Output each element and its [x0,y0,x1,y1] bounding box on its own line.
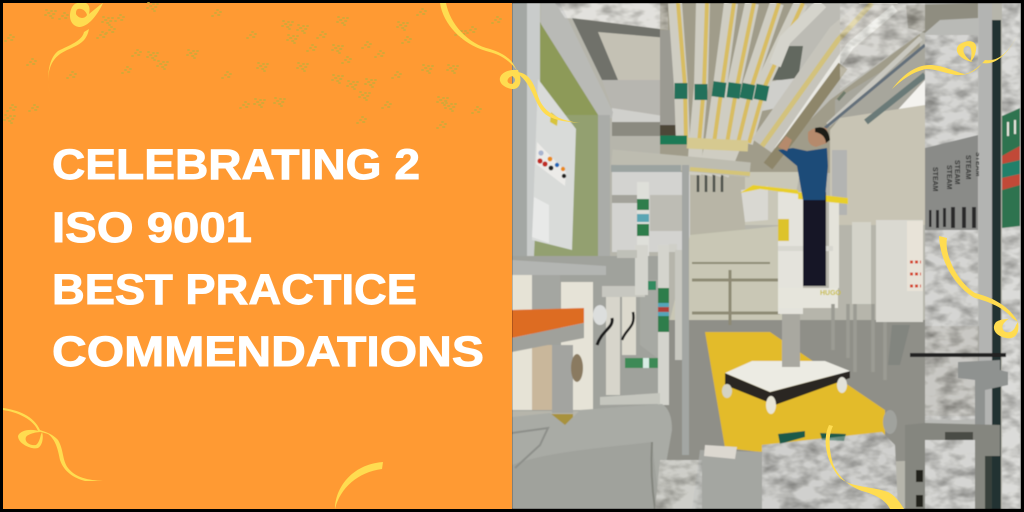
back shelving [692,263,780,325]
left column and beams [512,3,689,455]
orange actuator [512,308,584,426]
lift mast and platform [740,185,848,367]
ribbon: top left [48,3,103,93]
electrical cabinets [833,220,923,380]
technician [778,127,830,286]
big insulated column [906,3,979,509]
ribbon: bottom right [826,425,904,509]
heading: ISO 9001 [52,204,252,252]
silver duct at bottom [655,460,702,509]
side pipe base [1002,3,1021,509]
green valves [778,431,846,444]
photo: plant room with pipework [512,0,1021,509]
floor [664,320,926,462]
control cabinet [532,79,576,250]
foil texture [555,3,1020,509]
insulation bag small [698,450,762,509]
STEAM pipe markers: STEAM [953,160,960,185]
ribbon: bottom left [3,408,103,481]
confetti speckle texture [4,3,501,128]
heading: COMMENDATIONS [52,328,484,376]
STEAM pipe markers: STEAM [931,167,938,192]
ceiling ducts and voids [555,3,925,320]
lift logo: HUGO [820,290,842,297]
air handling unit [512,256,662,411]
STEAM pipe markers: STEAM [964,155,971,180]
STEAM pipe markers [929,152,981,228]
STEAM pipe markers: STEAM [974,152,981,177]
channel and side pipe markings [979,3,1020,509]
pipework [659,3,926,178]
large diagonal pipes [765,0,892,148]
riser with bands and pipe runs [600,244,682,405]
silver foil duct [762,432,898,509]
ribbon: right [939,236,1018,338]
ribbon: top right [892,34,1018,89]
centre riser pipes [637,182,649,256]
label on bag [704,445,737,459]
ribbon: top centre [440,3,581,123]
ribbon: bottom centre [335,462,383,509]
panel: orange background [3,3,512,509]
lift base [722,361,850,414]
bracket and clamp [883,353,1008,509]
heading: CELEBRATING 2 [52,141,420,189]
STEAM pipe markers: STEAM [945,165,952,190]
yellow floor marking [705,332,885,452]
heading: BEST PRACTICE [52,266,417,314]
heading [52,141,484,376]
horizontal pipes [660,136,687,144]
insulation bag [512,404,672,509]
